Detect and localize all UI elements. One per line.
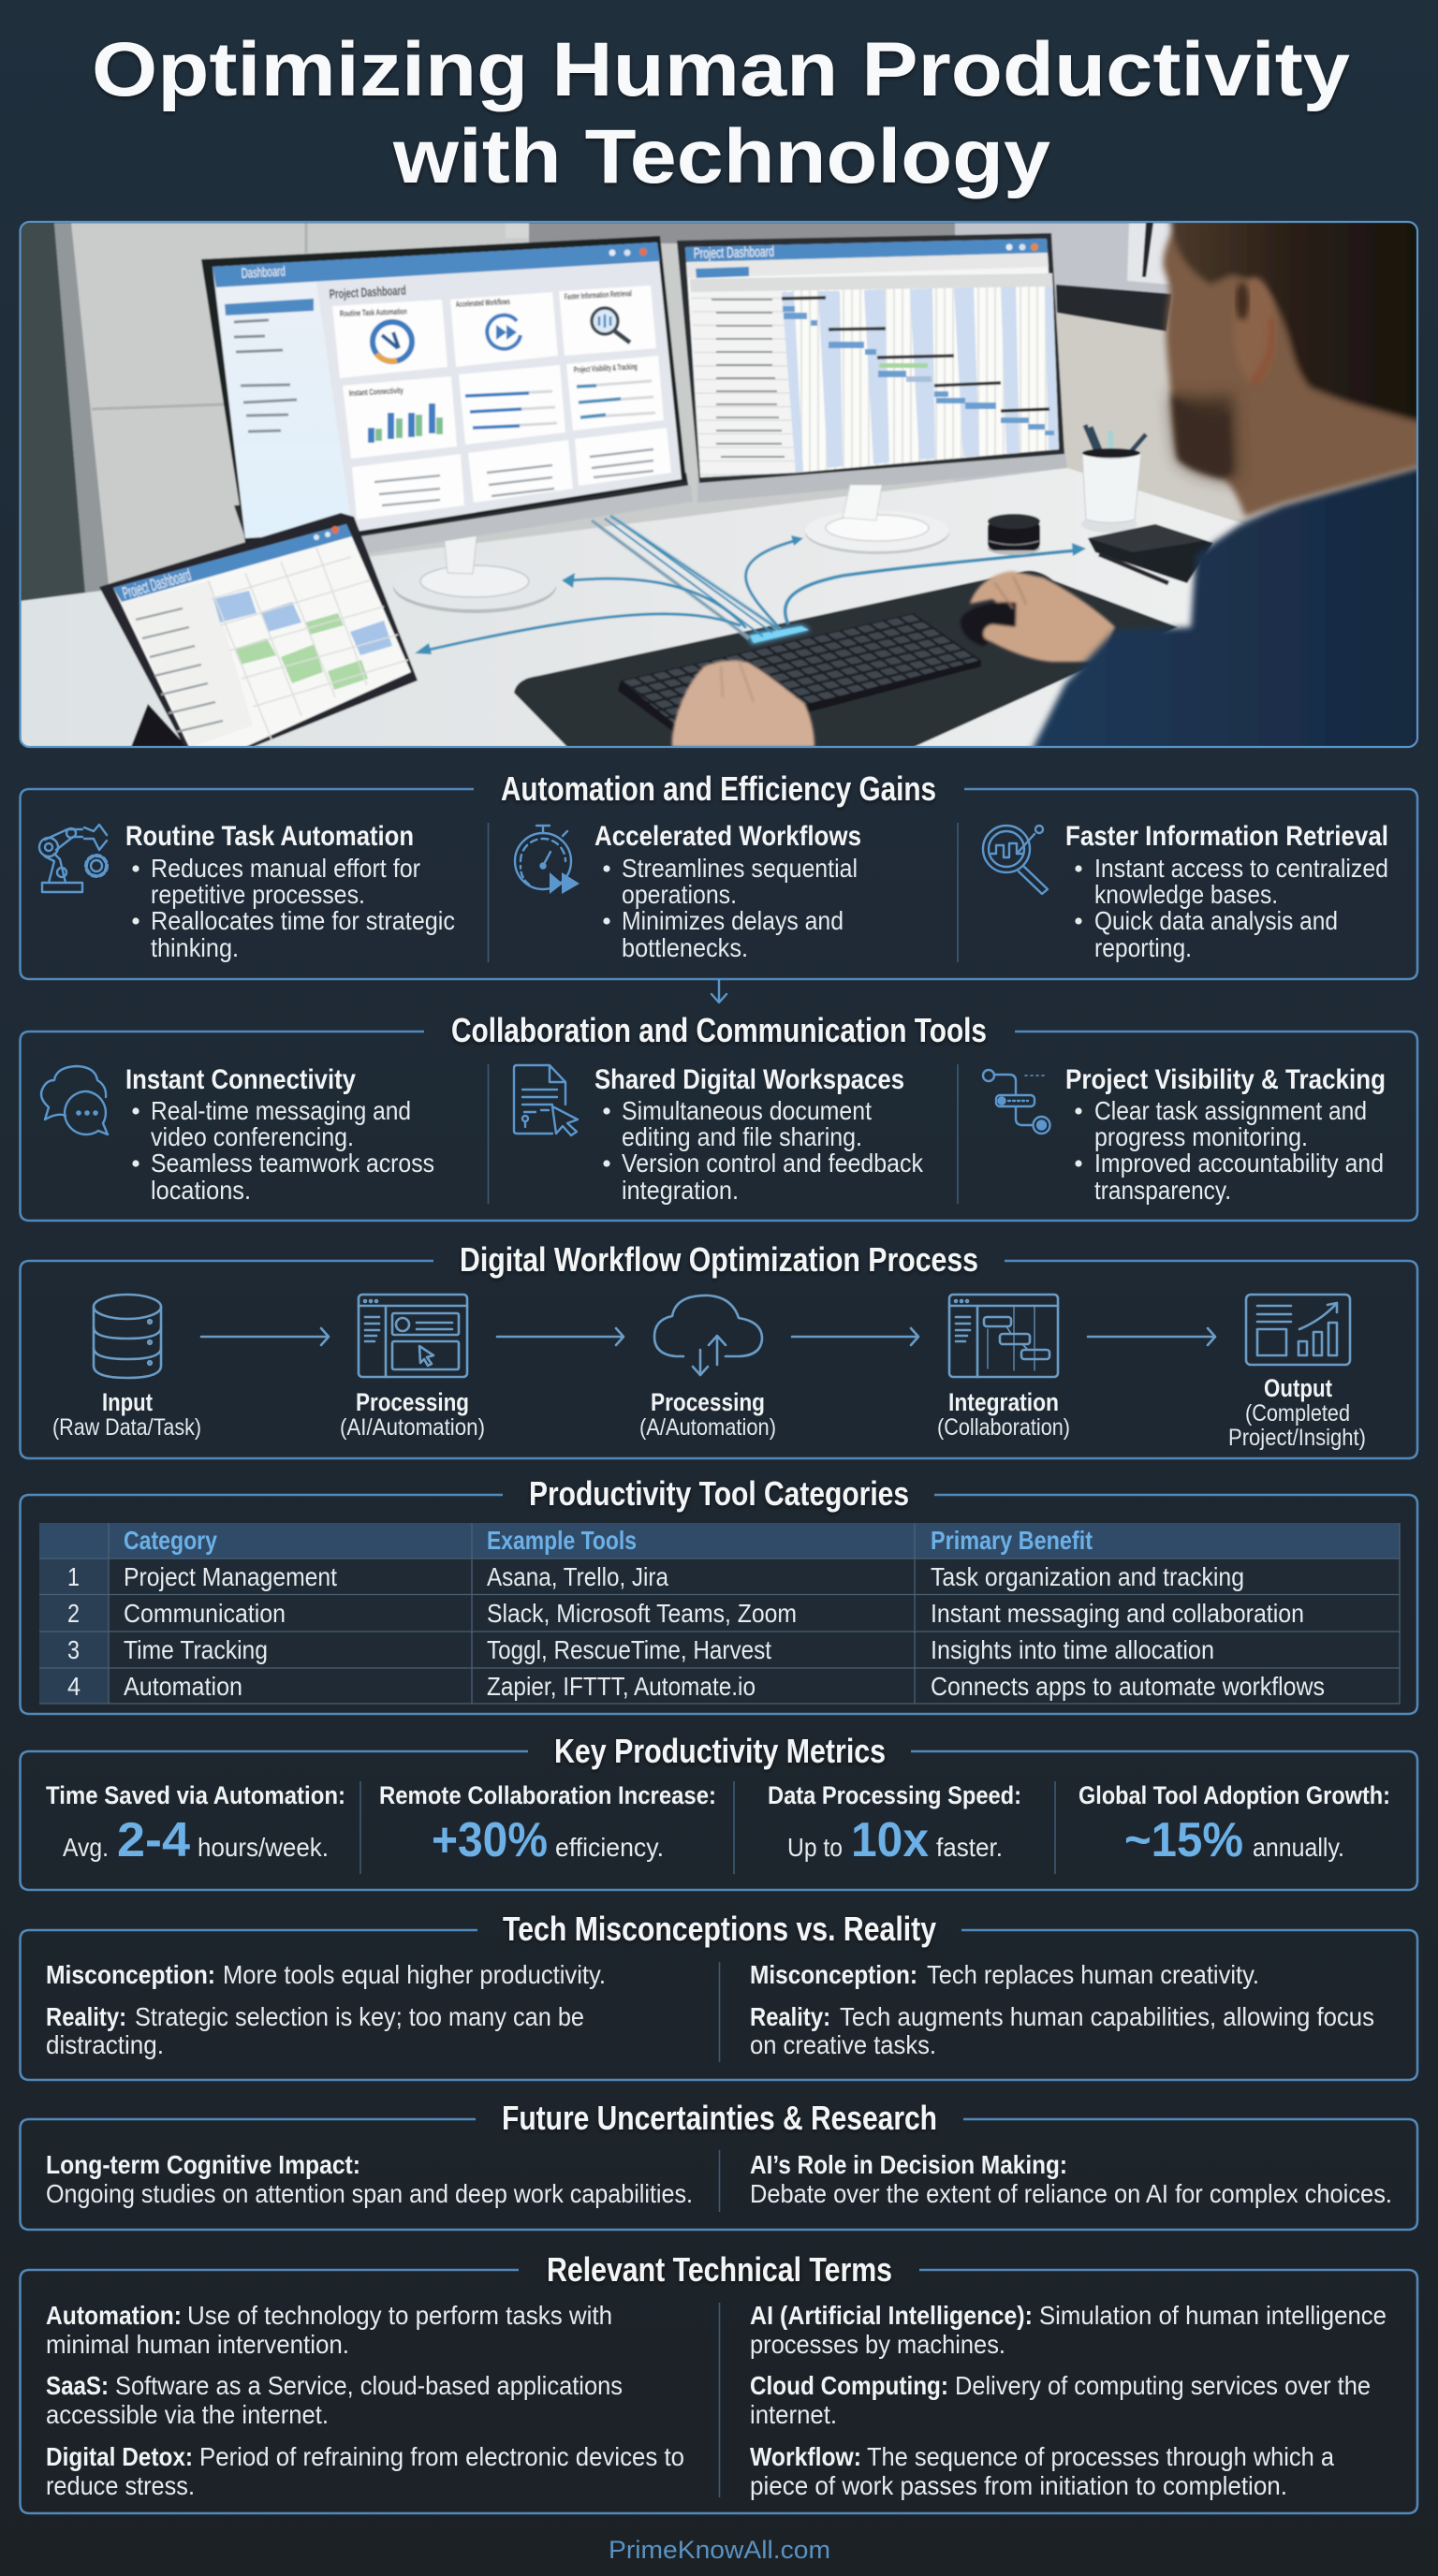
metric: time saved: 2-4 xyxy=(117,1813,190,1867)
table row 4 xyxy=(67,1672,1325,1701)
table row 1: Asana, Trello, Jira xyxy=(487,1562,668,1591)
table header: Example Tools xyxy=(487,1526,637,1555)
card: Project Visibility & Tracking: progress monitoring. xyxy=(1094,1122,1308,1151)
term: Cloud Computing: internet. xyxy=(750,2400,837,2429)
text block: left misconception: More tools equal higher productivity. xyxy=(223,1960,606,1989)
table row 3 xyxy=(67,1635,1214,1664)
text block: left misconception: Strategic selection is key; too many can be xyxy=(135,2002,584,2031)
term: Cloud Computing: Delivery of computing services over the xyxy=(955,2371,1371,2400)
icon: database xyxy=(94,1295,161,1378)
mat and keyboard xyxy=(514,571,1178,747)
desk surface xyxy=(21,468,1245,746)
term: Cloud Computing: Cloud Computing: xyxy=(750,2371,948,2400)
desk items: puck, cup, notebook xyxy=(988,425,1213,583)
card: Accelerated Workflows: Streamlines sequential xyxy=(622,854,858,883)
term: Digital Detox: reduce stress. xyxy=(46,2471,195,2500)
table row 4: Connects apps to automate workflows xyxy=(931,1672,1325,1701)
metric: processing speed xyxy=(768,1781,1021,1867)
left monitor: Faster Information Retrieval xyxy=(565,288,632,301)
table header xyxy=(124,1526,1093,1555)
table xyxy=(39,1523,1400,1704)
text block: right misconception: Tech replaces human creativity. xyxy=(927,1960,1259,1989)
title: Optimizing Human Productivity xyxy=(92,27,1350,112)
text block: left misconception: distracting. xyxy=(46,2030,164,2059)
left monitor: Routine Task Automation xyxy=(340,306,407,318)
heading: Digital Workflow Optimization Process xyxy=(460,1240,978,1279)
step: Output xyxy=(1228,1374,1366,1451)
panel: Productivity Tool Categories xyxy=(21,1474,1417,1714)
step: Processing AI xyxy=(340,1388,485,1441)
head xyxy=(1163,217,1423,517)
term: Artificial Intelligence: processes by machines. xyxy=(750,2330,1005,2359)
panel: Relevant Technical Terms xyxy=(21,2250,1417,2513)
card: Project Visibility & Tracking: Project Visibility & Tracking xyxy=(1065,1064,1386,1095)
left monitor: Instant Connectivity xyxy=(349,386,404,398)
step: Output: Project/Insight) xyxy=(1228,1425,1366,1451)
heading: Key Productivity Metrics xyxy=(554,1732,886,1770)
text block: AI decision making: AI’s Role in Decision Making: xyxy=(750,2150,1067,2179)
step: Input xyxy=(52,1388,201,1441)
table row 2 xyxy=(67,1599,1304,1628)
text block: cognitive impact: Long-term Cognitive Impact: xyxy=(46,2150,360,2179)
card: Shared Digital Workspaces: integration. xyxy=(622,1176,739,1205)
table header: Category xyxy=(124,1526,217,1555)
icon: stopwatch xyxy=(515,826,580,894)
card: Shared Digital Workspaces xyxy=(594,1064,924,1205)
arrow xyxy=(1088,1328,1215,1345)
table row 1: Task organization and tracking xyxy=(931,1562,1244,1591)
left monitor: Dashboard xyxy=(241,264,286,282)
card: Routine Task Automation: Routine Task Automation xyxy=(125,821,414,852)
right monitor xyxy=(677,233,1067,503)
table row 2: 2 xyxy=(67,1599,80,1628)
text block: right misconception: Misconception: xyxy=(750,1960,917,1989)
tablet: Project Dashboard xyxy=(121,565,193,603)
metric: processing speed: Up to xyxy=(787,1833,843,1862)
table row 2: Slack, Microsoft Teams, Zoom xyxy=(487,1599,797,1628)
heading: Future Uncertainties & Research xyxy=(502,2099,937,2137)
stands xyxy=(393,485,949,613)
arrow xyxy=(497,1328,624,1345)
metric: processing speed: faster. xyxy=(936,1833,1003,1862)
term: SaaS xyxy=(46,2371,623,2429)
table row 3: Insights into time allocation xyxy=(931,1635,1214,1664)
table row 4: Automation xyxy=(124,1672,242,1701)
icon: magnifier with chart xyxy=(983,826,1048,894)
icon: cloud transfer xyxy=(654,1295,762,1375)
footer: PrimeKnowAll.com xyxy=(609,2536,830,2564)
card: Faster Information Retrieval xyxy=(1065,821,1388,962)
left monitor: Accelerated Workflows xyxy=(456,297,510,309)
card: Project Visibility & Tracking xyxy=(1065,1064,1386,1205)
step: Integration xyxy=(937,1388,1070,1441)
table row 1 xyxy=(67,1562,1244,1591)
term: Artificial Intelligence xyxy=(750,2301,1387,2359)
step: Processing A xyxy=(639,1388,776,1441)
right monitor: Project Dashboard xyxy=(694,244,774,262)
term: Artificial Intelligence: AI (Artificial Intelligence): xyxy=(750,2301,1033,2330)
step: Input: Input xyxy=(102,1388,153,1416)
term: Cloud Computing xyxy=(750,2371,1371,2429)
term: Automation: Automation: xyxy=(46,2301,182,2330)
card: Faster Information Retrieval: knowledge bases. xyxy=(1094,880,1278,909)
card: Instant Connectivity: Real-time messaging and xyxy=(151,1096,411,1125)
card: Accelerated Workflows xyxy=(594,821,861,962)
icon: app window with cursor xyxy=(359,1295,467,1377)
card: Instant Connectivity: Instant Connectivity xyxy=(125,1064,356,1095)
text block: right misconception: Tech augments human capabilities, allowing focus xyxy=(840,2002,1374,2031)
card: Instant Connectivity: locations. xyxy=(151,1176,251,1205)
metric: time saved xyxy=(46,1781,345,1867)
table header: Primary Benefit xyxy=(931,1526,1093,1555)
text block: right misconception xyxy=(750,1960,1374,2059)
table row 1: 1 xyxy=(67,1562,80,1591)
metric: adoption growth: Global Tool Adoption Growth: xyxy=(1078,1781,1390,1809)
card: Shared Digital Workspaces: Simultaneous document xyxy=(622,1096,872,1125)
metric: collaboration xyxy=(379,1781,716,1867)
panel: Collaboration and Communication Tools xyxy=(21,1011,1417,1221)
card: Routine Task Automation xyxy=(125,821,455,962)
panel: Tech Misconceptions vs. Reality xyxy=(21,1910,1417,2080)
card: Accelerated Workflows: Accelerated Workflows xyxy=(594,821,861,852)
metric: adoption growth: annually. xyxy=(1253,1833,1344,1862)
tablet xyxy=(99,513,418,747)
arrow xyxy=(792,1328,918,1345)
step: Output: Output xyxy=(1264,1374,1332,1402)
arrow: section connector xyxy=(712,980,726,1003)
term: Digital Detox: Period of refraining from electronic devices to xyxy=(199,2442,684,2471)
panel: Future Uncertainties & Research xyxy=(21,2099,1417,2230)
heading: Relevant Technical Terms xyxy=(547,2250,892,2289)
card: Routine Task Automation: Reduces manual effort for xyxy=(151,854,420,883)
term: Workflow xyxy=(750,2442,1334,2500)
metric: collaboration: Remote Collaboration Increase: xyxy=(379,1781,716,1809)
text block: AI decision making xyxy=(750,2150,1392,2208)
heading: Collaboration and Communication Tools xyxy=(451,1011,987,1049)
term: SaaS: SaaS: xyxy=(46,2371,109,2400)
table row 3: Toggl, RescueTime, Harvest xyxy=(487,1635,771,1664)
title xyxy=(92,27,1350,199)
card: Routine Task Automation: repetitive processes. xyxy=(151,880,365,909)
text block: cognitive impact xyxy=(46,2150,693,2208)
card: Instant Connectivity xyxy=(125,1064,434,1205)
term: Digital Detox: Digital Detox: xyxy=(46,2442,193,2471)
card: Shared Digital Workspaces: Version control and feedback xyxy=(622,1149,924,1178)
term: Automation: Use of technology to perform tasks with xyxy=(187,2301,612,2330)
card: Faster Information Retrieval: Instant access to centralized xyxy=(1094,854,1388,883)
title: with Technology xyxy=(392,114,1050,199)
hands and mouse xyxy=(672,571,1115,747)
term: Digital Detox xyxy=(46,2442,684,2500)
workflow arrows and cables xyxy=(415,516,1086,654)
table row 3: 3 xyxy=(67,1635,80,1664)
card: Faster Information Retrieval: Faster Information Retrieval xyxy=(1065,821,1388,852)
step: Processing AI: (AI/Automation) xyxy=(340,1414,485,1441)
card: Routine Task Automation: Reallocates time for strategic xyxy=(151,906,455,935)
panel: Digital Workflow Optimization Process xyxy=(21,1240,1417,1458)
term: Artificial Intelligence: Simulation of human intelligence xyxy=(1039,2301,1387,2330)
step: Output: (Completed xyxy=(1245,1400,1350,1427)
left monitor xyxy=(201,236,693,554)
card: Routine Task Automation: thinking. xyxy=(151,933,239,962)
text block: cognitive impact: Ongoing studies on attention span and deep work capabilities. xyxy=(46,2179,693,2208)
card: Accelerated Workflows: Minimizes delays and xyxy=(622,906,844,935)
metric: processing speed: Data Processing Speed: xyxy=(768,1781,1021,1809)
card: Faster Information Retrieval: reporting. xyxy=(1094,933,1192,962)
metric: time saved: Time Saved via Automation: xyxy=(46,1781,345,1809)
metric: collaboration: efficiency. xyxy=(555,1833,664,1862)
heading: Productivity Tool Categories xyxy=(529,1474,909,1513)
term: Automation: minimal human intervention. xyxy=(46,2330,349,2359)
text block: left misconception: Reality: xyxy=(46,2002,126,2031)
icon: document with cursor xyxy=(514,1065,578,1135)
term: SaaS: accessible via the internet. xyxy=(46,2400,329,2429)
metric: adoption growth: ~15% xyxy=(1124,1813,1243,1867)
left monitor: Project Dashboard xyxy=(329,283,406,301)
arrow xyxy=(201,1328,329,1345)
table row 3: Time Tracking xyxy=(124,1635,268,1664)
card: Project Visibility & Tracking: Clear task assignment and xyxy=(1094,1096,1367,1125)
icon: chat bubbles xyxy=(41,1066,108,1134)
term: SaaS: Software as a Service, cloud-based applications xyxy=(115,2371,623,2400)
man xyxy=(1030,217,1423,754)
metric: time saved: hours/week. xyxy=(198,1833,329,1862)
metric: time saved: Avg. xyxy=(63,1833,109,1862)
card: Accelerated Workflows: operations. xyxy=(622,880,737,909)
step: Processing A: (A/Automation) xyxy=(639,1414,776,1441)
metric: collaboration: +30% xyxy=(432,1813,548,1867)
metric: adoption growth xyxy=(1078,1781,1390,1867)
card: Accelerated Workflows: bottlenecks. xyxy=(622,933,748,962)
heading: Automation and Efficiency Gains xyxy=(501,769,936,808)
card: Project Visibility & Tracking: Improved accountability and xyxy=(1094,1149,1384,1178)
table row 4: 4 xyxy=(67,1672,81,1701)
card: Instant Connectivity: Seamless teamwork across xyxy=(151,1149,434,1178)
text block: AI decision making: Debate over the extent of reliance on AI for complex choices. xyxy=(750,2179,1392,2208)
step: Input: (Raw Data/Task) xyxy=(52,1414,201,1441)
metric: processing speed: 10x xyxy=(851,1813,929,1867)
text block: right misconception: Reality: xyxy=(750,2002,830,2031)
step: Processing AI: Processing xyxy=(356,1388,469,1416)
panel: Key Productivity Metrics xyxy=(21,1732,1417,1890)
card: Shared Digital Workspaces: Shared Digital Workspaces xyxy=(594,1064,904,1095)
table row 2: Instant messaging and collaboration xyxy=(931,1599,1304,1628)
card: Faster Information Retrieval: Quick data analysis and xyxy=(1094,906,1338,935)
panel: hero photo illustration of a workstation xyxy=(21,217,1423,754)
text block: right misconception: on creative tasks. xyxy=(750,2030,936,2059)
card: Project Visibility & Tracking: transparency. xyxy=(1094,1176,1231,1205)
heading: Tech Misconceptions vs. Reality xyxy=(503,1910,936,1948)
card: Instant Connectivity: video conferencing. xyxy=(151,1122,354,1151)
table row 2: Communication xyxy=(124,1599,286,1628)
step: Processing A: Processing xyxy=(651,1388,765,1416)
term: Workflow: piece of work passes from initiation to completion. xyxy=(750,2471,1287,2500)
table row 4: Zapier, IFTTT, Automate.io xyxy=(487,1672,756,1701)
term: Workflow: Workflow: xyxy=(750,2442,861,2471)
beard and ear xyxy=(1172,277,1275,479)
step: Integration: (Collaboration) xyxy=(937,1414,1070,1441)
hero frame xyxy=(21,222,1417,747)
icon: report with growth chart xyxy=(1246,1295,1350,1365)
step: Integration: Integration xyxy=(948,1388,1059,1416)
left monitor: Project Visibility & Tracking xyxy=(574,361,638,374)
shirt and chair xyxy=(1030,468,1423,754)
term: Automation xyxy=(46,2301,612,2359)
term: Workflow: The sequence of processes through which a xyxy=(867,2442,1334,2471)
text block: left misconception: Misconception: xyxy=(46,1960,215,1989)
icon: robot arm xyxy=(39,825,107,892)
icon: gantt window xyxy=(949,1295,1058,1377)
table row 1: Project Management xyxy=(124,1562,337,1591)
card: Shared Digital Workspaces: editing and file sharing. xyxy=(622,1122,862,1151)
text block: left misconception xyxy=(46,1960,606,2059)
panel: Automation and Efficiency Gains xyxy=(21,769,1417,979)
icon: task flow tracker xyxy=(983,1070,1050,1134)
